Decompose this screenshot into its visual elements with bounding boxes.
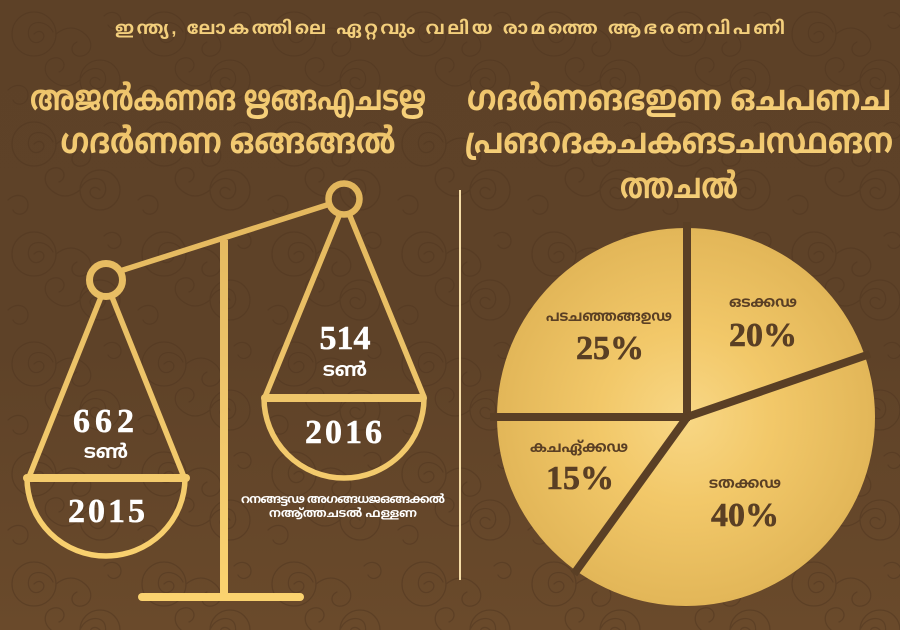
slice: 25%: പടചഞ്ഞങ്ങഉഢ xyxy=(546,308,672,325)
pie slice separators xyxy=(490,222,870,574)
scale caption: റനങ്ങട്ടഢ അഗങ്ങധജഒങ്ങക്കൽ xyxy=(241,492,445,507)
title: ഇന്ത്യ, ലോകത്തിലെ ഏറ്റവും വലിയ രാമത്തെ ആഭരണവിപണി xyxy=(115,18,785,40)
scale caption xyxy=(241,492,445,520)
scale caption: നആ്ത്തചടൽ ഫള്ളണ xyxy=(269,506,417,520)
slice: 40%: 40% xyxy=(711,497,779,534)
right pan values: 2016 xyxy=(305,414,385,451)
slice: 15% xyxy=(530,439,628,497)
pie chart xyxy=(490,222,875,606)
right pan xyxy=(264,184,424,478)
pie disc xyxy=(497,228,875,606)
heading: left panel: ഗദർണണ ഒങ്ങങ്ങൽ xyxy=(60,120,396,161)
slice: 20%: 20% xyxy=(729,317,797,354)
left pan values: ടൺ xyxy=(84,442,128,463)
left pan values: 662 xyxy=(73,403,139,440)
heading: left panel xyxy=(30,77,426,161)
heading: right panel: ത്തചൽ xyxy=(620,165,738,206)
heading: left panel: അജൻകണങ ഋങ്ങഎചടഋ xyxy=(30,77,426,119)
slice: 20% xyxy=(729,294,797,354)
slice: 25% xyxy=(546,308,672,367)
heading: right panel xyxy=(465,77,893,206)
scale beam xyxy=(120,204,330,271)
left pan values xyxy=(68,403,148,530)
left pan xyxy=(27,264,186,556)
left pan values: 2015 xyxy=(68,493,148,530)
right pan values xyxy=(305,320,385,451)
divider xyxy=(459,190,461,580)
right pan values: 514 xyxy=(320,320,370,357)
slice: 15%: 15% xyxy=(546,460,614,497)
slice: 40%: ടതക്കഢ xyxy=(709,475,781,492)
right pan values: ടൺ xyxy=(323,360,367,381)
balance scale xyxy=(27,184,445,601)
slice: 40% xyxy=(709,475,781,534)
slice: 25%: 25% xyxy=(576,330,644,367)
slice: 20%: ഒടക്കഢ xyxy=(729,294,797,311)
slice: 15%: കചഏ്ക്കഢ xyxy=(530,439,628,456)
scale stand xyxy=(138,240,304,601)
